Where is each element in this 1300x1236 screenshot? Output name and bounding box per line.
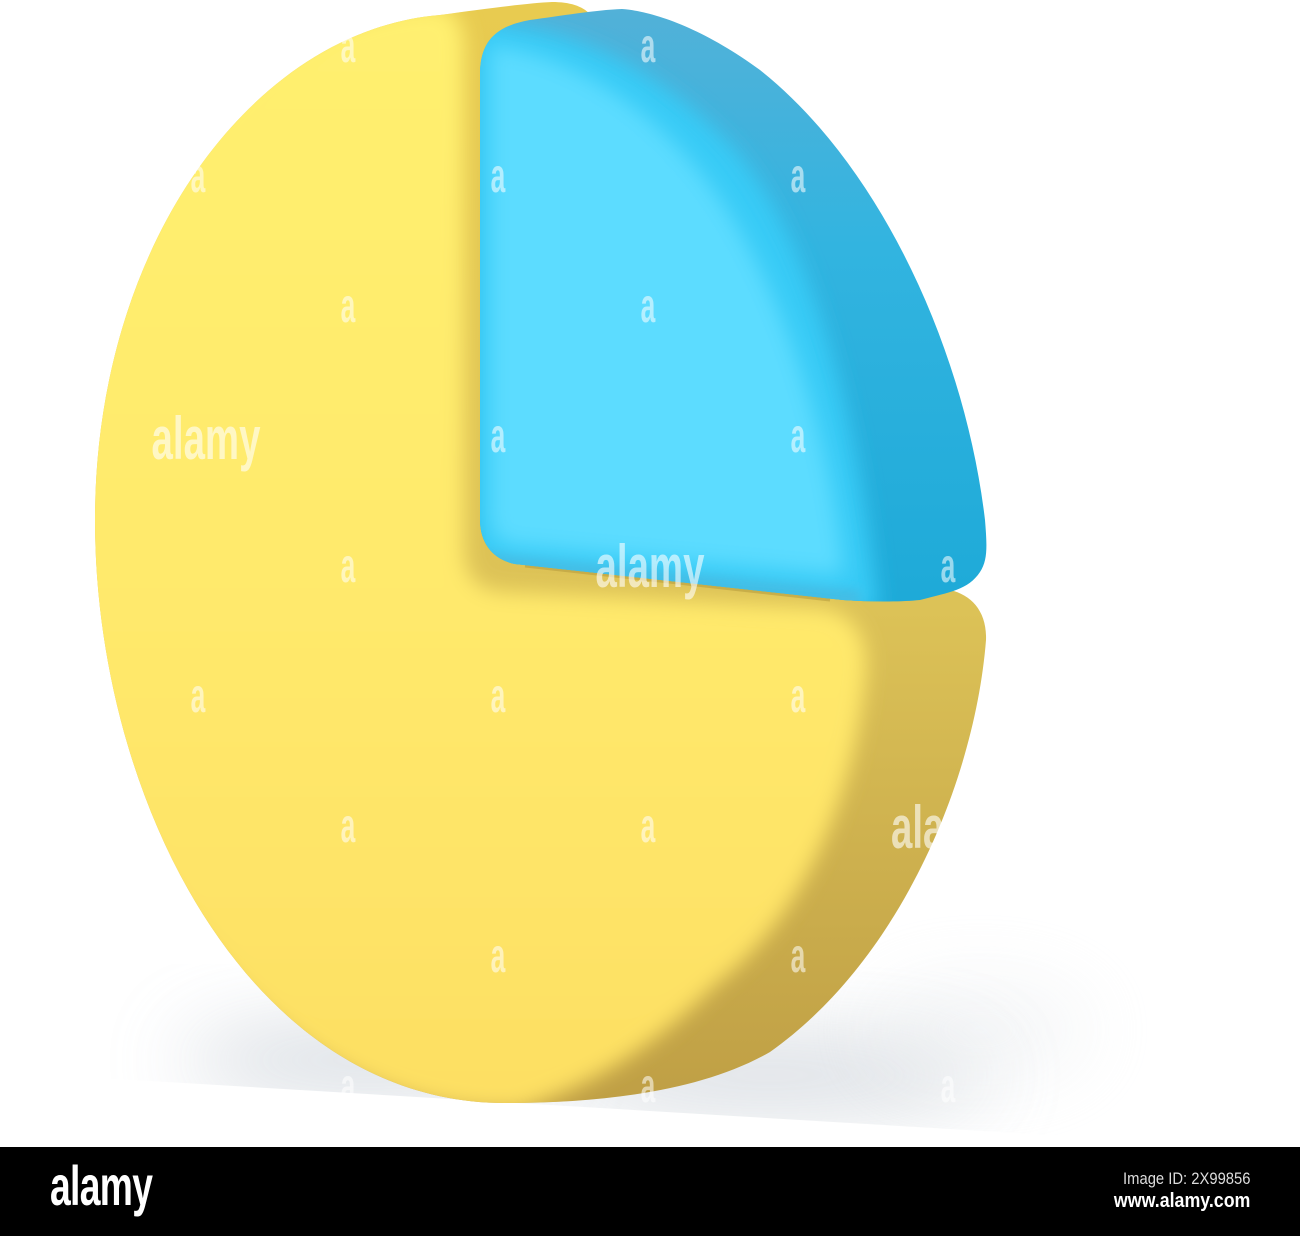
watermark: a [491,410,506,463]
website: www.alamy.com [1113,1190,1250,1212]
pie chart illustration [95,2,1033,1128]
watermark: a [341,800,356,853]
blue slice: quarter segment [470,9,986,612]
watermark: a [791,670,806,723]
watermark: a [941,1060,956,1113]
watermark: a [341,540,356,593]
watermark: a [791,410,806,463]
blue front face [470,10,878,612]
watermark: a [341,20,356,73]
watermark: a [191,670,206,723]
watermark: a [791,150,806,203]
watermark: a [491,930,506,983]
image id: Image ID: 2X99856 [1123,1169,1250,1188]
yellow side wall [95,2,986,1103]
watermark: ala [891,793,945,861]
ground shadow [180,985,1090,1111]
watermark: a [641,20,656,73]
watermark: a [641,280,656,333]
watermark: a [341,1060,356,1113]
blue contact shadow [525,566,830,600]
watermark: a [641,1060,656,1113]
yellow front face [60,5,866,1111]
footer bar [0,1147,1300,1236]
watermark: a [341,280,356,333]
watermark: a [191,150,206,203]
watermark: alamy [596,532,704,600]
watermark [152,20,956,1113]
alamy logo: alamy [50,1154,152,1217]
watermark: a [641,800,656,853]
watermark: a [791,930,806,983]
watermark: alamy [152,404,260,472]
blue side wall [480,9,986,602]
watermark: a [941,540,956,593]
watermark: a [491,670,506,723]
yellow slice: three-quarter segment [60,2,986,1111]
watermark: a [491,150,506,203]
